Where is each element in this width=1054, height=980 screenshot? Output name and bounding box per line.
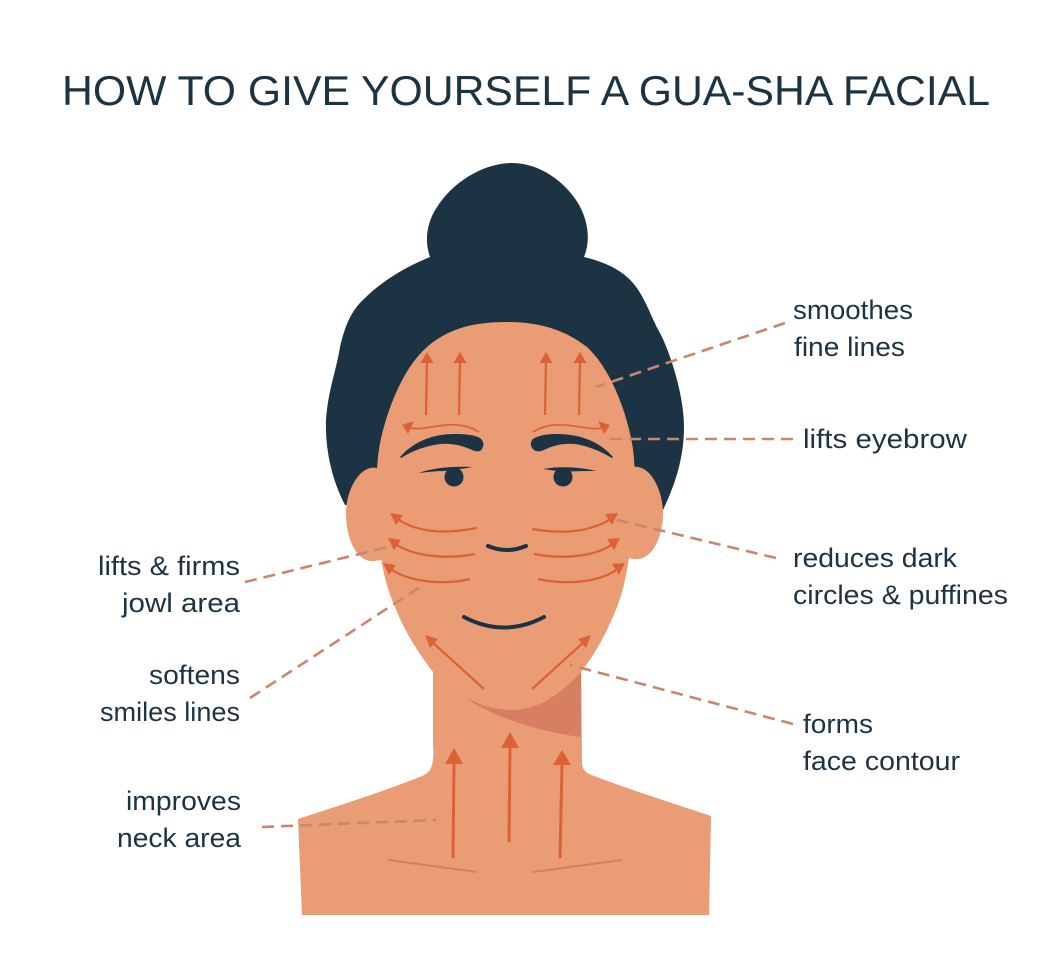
neck shadow — [456, 670, 581, 737]
label: softens smiles lines: softens — [149, 660, 240, 690]
label: improves neck area — [117, 786, 242, 853]
label: smoothes fine lines — [793, 295, 913, 362]
massage arrows: brows — [402, 421, 610, 434]
collarbone lines — [388, 860, 622, 872]
label: softens smiles lines: smiles lines — [100, 697, 240, 727]
label: forms face contour: forms — [803, 709, 873, 739]
callout line: fine lines — [596, 323, 785, 387]
callout line: smile lines — [250, 587, 420, 698]
callout line: eyebrow — [610, 438, 793, 440]
right eye — [543, 467, 596, 486]
left eyebrow — [400, 434, 483, 458]
massage arrows: cheeks right — [532, 513, 625, 582]
nose — [488, 546, 526, 550]
portrait illustration — [298, 163, 711, 915]
left eye — [419, 467, 472, 486]
callout line: dark circles — [617, 520, 776, 558]
label: lifts eyebrow: lifts eyebrow — [803, 424, 968, 454]
title: HOW TO GIVE YOURSELF A GUA-SHA FACIAL — [62, 67, 990, 114]
left ear — [346, 468, 395, 561]
label: reduces dark circles — [793, 543, 1008, 610]
label: improves neck area: improves — [126, 786, 241, 816]
label: lifts and firms jowl area: lifts & firms — [98, 551, 240, 581]
massage arrows: cheeks left — [383, 513, 477, 582]
massage arrows: neck — [445, 732, 571, 858]
label: lifts and firms jowl area — [98, 551, 241, 618]
label: reduces dark circles: reduces dark — [793, 543, 958, 573]
right ear — [610, 467, 663, 559]
label: softens smiles lines — [100, 660, 240, 727]
label: forms face contour: face contour — [803, 746, 960, 776]
massage arrows: jaw — [425, 635, 591, 689]
label: forms face contour — [803, 709, 960, 776]
label: lifts and firms jowl area: jowl area — [121, 588, 241, 618]
callout line: jowl — [245, 547, 388, 582]
label: smoothes fine lines: smoothes — [793, 295, 913, 325]
mouth — [464, 617, 544, 628]
label: improves neck area: neck area — [117, 823, 242, 853]
massage arrows: forehead — [420, 352, 586, 415]
face — [376, 322, 635, 710]
hair and bun — [326, 163, 684, 510]
label: reduces dark circles: circles & puffines — [793, 580, 1008, 610]
right eyebrow — [531, 434, 613, 458]
callout line: face contour — [570, 665, 793, 724]
callout line: neck — [262, 820, 436, 827]
neck and shoulders — [298, 660, 711, 915]
label: smoothes fine lines: fine lines — [794, 332, 905, 362]
